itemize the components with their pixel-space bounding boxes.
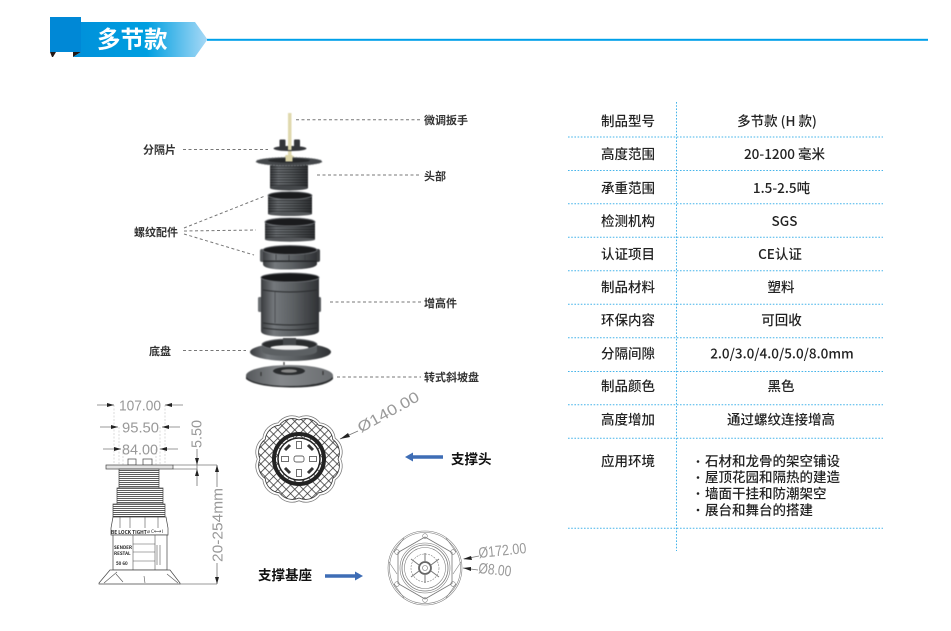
row: height range: 20-1200 毫米 <box>744 143 826 163</box>
callout: head <box>317 168 446 184</box>
dimension Ø172.00: Ø172.00 <box>478 540 527 562</box>
row: spacer gap <box>601 342 854 362</box>
callout: head: 头部 <box>424 168 446 184</box>
support head plan view <box>256 389 422 502</box>
dimension Ø8.00: Ø8.00 <box>478 560 512 580</box>
row: material <box>601 276 795 296</box>
row: height range: 高度范围 <box>601 143 655 163</box>
callout: adjusting wrench: 微调扳手 <box>424 112 468 128</box>
dimension 95.50 <box>100 420 180 436</box>
row: certification <box>601 243 802 263</box>
application list: 石材和龙骨的架空铺设 <box>705 450 840 470</box>
title text: 多节款 <box>97 20 168 54</box>
application list: 展台和舞台的搭建 <box>705 499 813 519</box>
threaded ring 2 <box>265 218 315 242</box>
arrow: support base <box>325 572 363 580</box>
row: colour: 制品颜色 <box>601 375 655 395</box>
spacer tab <box>274 130 306 151</box>
head <box>256 155 322 190</box>
specification table <box>568 102 883 551</box>
dimension Ø140.00: Ø140.00 <box>355 389 422 436</box>
row: height increase: 高度增加 <box>601 408 655 428</box>
banner ribbon <box>73 22 208 57</box>
row: height increase: 通过螺纹连接增高 <box>727 408 835 428</box>
arrow: support head <box>405 452 443 462</box>
application list <box>697 450 840 519</box>
dimension 5.50: 5.50 <box>188 420 206 448</box>
exploded product view <box>246 113 333 388</box>
dimension guide lines <box>114 405 165 465</box>
row: height increase <box>601 408 835 428</box>
row: testing body: 检测机构 <box>601 210 655 230</box>
title banner <box>50 17 928 57</box>
banner dark folds <box>50 52 81 57</box>
row: model <box>601 110 817 130</box>
row: model: 多节款 (H 款) <box>737 110 817 130</box>
threaded ring 1 <box>268 192 312 216</box>
callout: slope plate: 转式斜坡盘 <box>424 369 479 385</box>
row: load range: 1.5-2.5吨 <box>753 177 811 197</box>
row: material: 制品材料 <box>601 276 655 296</box>
dimension 84.00: 84.00 <box>122 442 158 458</box>
dimension 20-254mm: 20-254mm <box>210 488 226 562</box>
callout: threaded fittings <box>134 196 265 255</box>
row: environmental: 可回收 <box>761 309 802 329</box>
row: certification: 认证项目 <box>601 243 655 263</box>
row: applications <box>601 450 840 519</box>
row: testing body: SGS <box>772 210 797 230</box>
dimension 95.50: 95.50 <box>122 420 159 436</box>
base tray <box>250 338 331 361</box>
height extension <box>258 273 321 337</box>
table rules <box>568 102 883 551</box>
callout: base tray <box>149 343 246 359</box>
row: applications: 应用环境 <box>601 450 655 470</box>
row: colour <box>601 375 795 395</box>
row: spacer gap: 2.0/3.0/4.0/5.0/8.0mm <box>710 342 854 362</box>
banner rule <box>207 39 928 41</box>
callout: spacer tab <box>143 142 268 158</box>
dimension 107.00 <box>97 398 183 414</box>
callout: height extension: 增高件 <box>424 295 457 311</box>
row: environmental: 环保内容 <box>601 309 655 329</box>
side profile: BE LOCK TIGHT <box>111 529 147 536</box>
rotating slope plate <box>246 362 333 388</box>
dimension 84.00 <box>103 442 178 458</box>
row: load range <box>601 177 811 197</box>
application list: 屋顶花园和隔热的建造 <box>705 466 840 486</box>
callout: height extension <box>330 295 457 311</box>
row: colour: 黑色 <box>768 375 795 395</box>
row: spacer gap: 分隔间隙 <box>601 342 655 362</box>
head scalloped outline <box>256 416 342 502</box>
callout: spacer tab: 分隔片 <box>143 142 176 158</box>
locking collar <box>260 246 320 270</box>
row: load range: 承重范围 <box>601 177 655 197</box>
label: support head: 支撑头 <box>451 448 492 468</box>
dimension 20-254mm <box>180 465 226 584</box>
side profile: ⌀ C⟷ I <box>147 528 163 535</box>
callout: base tray: 底盘 <box>149 343 171 359</box>
dimension Ø140.00 <box>340 389 422 439</box>
side profile: SENDER <box>114 545 132 551</box>
callout: threaded fittings: 螺纹配件 <box>134 224 178 240</box>
label: support base: 支撑基座 <box>258 564 312 584</box>
side elevation dimension drawing <box>97 398 226 584</box>
support base plan view <box>388 531 527 605</box>
row: environmental <box>601 309 802 329</box>
side profile: 50 60 <box>116 561 128 567</box>
row: model: 制品型号 <box>601 110 655 130</box>
side profile <box>99 459 180 584</box>
row: testing body <box>601 210 797 230</box>
adjusting wrench <box>285 113 294 165</box>
banner tab <box>50 17 81 52</box>
application list: 墙面干挂和防潮架空 <box>705 482 826 502</box>
side profile: RESTAL <box>114 551 131 557</box>
dimension 107.00: 107.00 <box>119 398 161 414</box>
dimension 5.50 <box>173 420 217 486</box>
row: height range <box>601 143 826 163</box>
row: material: 塑料 <box>768 276 795 296</box>
row: certification: CE认证 <box>758 243 802 263</box>
base circles <box>388 531 462 605</box>
